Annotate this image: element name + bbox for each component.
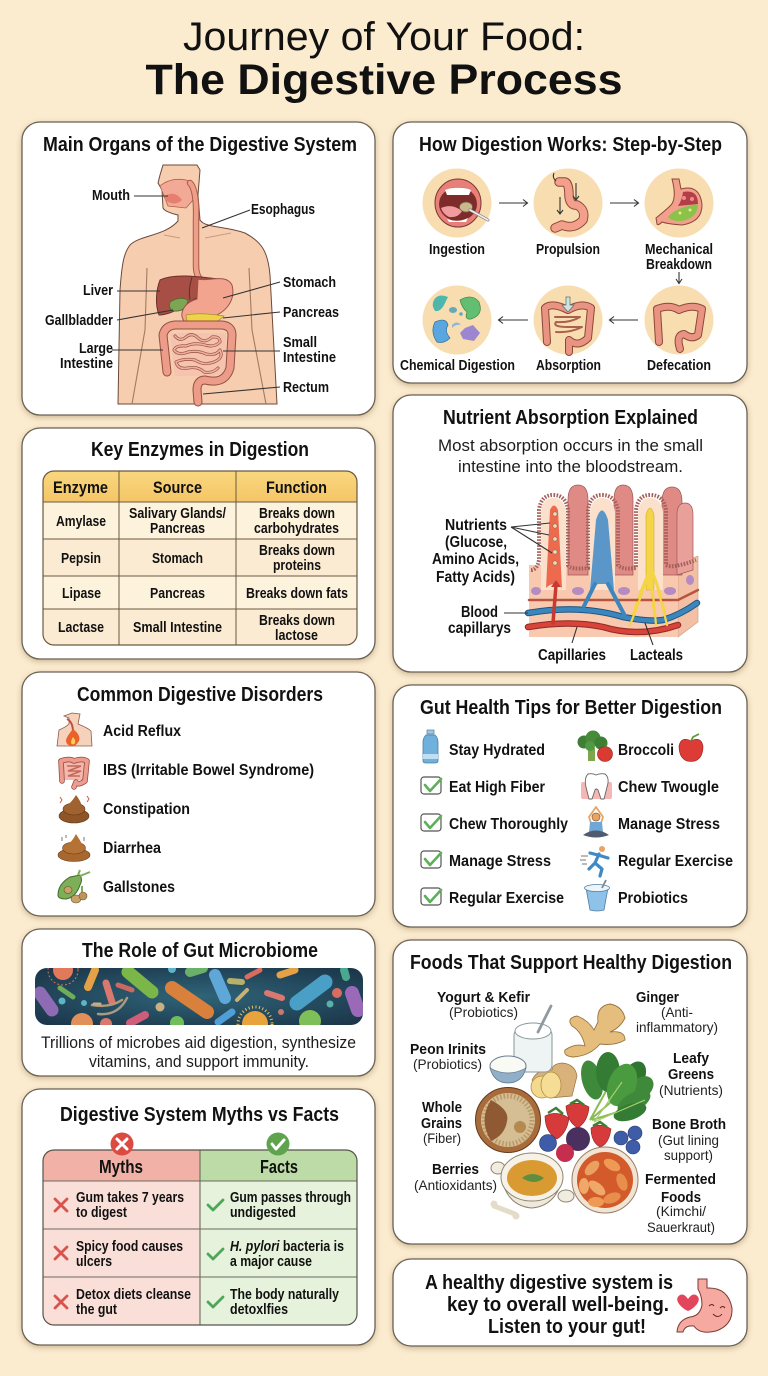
closing text: key to overall well-being. bbox=[447, 1294, 669, 1316]
icon: runner bbox=[580, 846, 608, 876]
microbiome description: Trillions of microbes aid digestion, synthesize bbox=[41, 1034, 356, 1052]
description: nutrient absorption: intestine into the bloodstream. bbox=[458, 457, 683, 476]
myths and facts table: Spicy food causes bbox=[76, 1239, 183, 1255]
villi diagram bbox=[528, 485, 698, 637]
myths and facts table: ulcers bbox=[76, 1254, 112, 1270]
step labels: Absorption bbox=[536, 358, 601, 374]
step labels: Ingestion bbox=[429, 242, 485, 258]
food labels: Sauerkraut) bbox=[647, 1219, 715, 1235]
yogurt jar bbox=[490, 1006, 552, 1083]
enzymes table: Salivary Glands/ bbox=[129, 506, 226, 522]
title bbox=[146, 15, 622, 104]
food labels: Ginger bbox=[636, 990, 679, 1006]
nutrient labels: Blood bbox=[461, 604, 498, 621]
myths and facts table: to digest bbox=[76, 1205, 127, 1221]
closing text: Listen to your gut! bbox=[488, 1316, 646, 1338]
step arrows bbox=[498, 200, 682, 324]
myths and facts table: Myths bbox=[99, 1157, 143, 1177]
icon: check bbox=[421, 851, 441, 868]
panel: closing message bbox=[393, 1259, 747, 1346]
tip label with apple: Broccoli bbox=[618, 742, 674, 759]
heading: gut health tips: Gut Health Tips for Better Digestion bbox=[420, 697, 722, 719]
organ labels bbox=[45, 188, 339, 396]
enzymes table: Breaks down bbox=[259, 613, 335, 629]
heading: nutrient absorption: Nutrient Absorption Explained bbox=[443, 407, 698, 429]
food labels: Peon Irinits bbox=[410, 1042, 486, 1058]
title: The Digestive Process bbox=[146, 56, 622, 104]
nutrient labels: Capillaries bbox=[538, 647, 606, 664]
myths and facts table: Gum takes 7 years bbox=[76, 1190, 184, 1206]
myths and facts table: undigested bbox=[230, 1205, 296, 1221]
food labels: (Probiotics) bbox=[449, 1004, 518, 1020]
food labels: support) bbox=[664, 1147, 713, 1163]
step labels: Propulsion bbox=[536, 242, 600, 258]
icon: myths cross bbox=[110, 1132, 134, 1156]
organ labels: Intestine bbox=[283, 350, 336, 366]
food labels: Grains bbox=[421, 1116, 462, 1132]
step icon: propulsion bbox=[534, 168, 602, 238]
tip label: Chew Thoroughly bbox=[449, 816, 568, 833]
organ labels: Small bbox=[283, 335, 317, 351]
myths and facts table: The body naturally bbox=[230, 1287, 339, 1303]
microbiome description bbox=[41, 1034, 356, 1071]
enzymes table: lactose bbox=[275, 628, 318, 644]
disorder label: Diarrhea bbox=[103, 840, 161, 857]
closing text: A healthy digestive system is bbox=[425, 1272, 673, 1294]
panel: gut health tips bbox=[393, 685, 747, 927]
enzymes table: Small Intestine bbox=[133, 620, 222, 636]
panel: main organs bbox=[22, 122, 375, 415]
organ labels: Esophagus bbox=[251, 202, 315, 218]
nutrient labels bbox=[432, 517, 683, 664]
enzymes table: Stomach bbox=[152, 551, 203, 567]
enzymes table: Breaks down bbox=[259, 506, 335, 522]
spinach bbox=[577, 1052, 658, 1125]
icon: facts check bbox=[266, 1132, 290, 1156]
myths and facts table: Facts bbox=[260, 1157, 298, 1177]
food labels: Berries bbox=[432, 1162, 479, 1178]
enzymes table: Amylase bbox=[56, 514, 106, 530]
enzymes table: Pancreas bbox=[150, 586, 205, 602]
enzymes table: Pancreas bbox=[150, 521, 205, 537]
step icon: chemical digestion bbox=[422, 286, 492, 354]
step labels: Chemical Digestion bbox=[400, 358, 515, 374]
tip label: Chew Twougle bbox=[618, 779, 719, 796]
nutrient labels: capillarys bbox=[448, 620, 511, 637]
organ labels: Liver bbox=[83, 283, 113, 299]
heading: how digestion works: How Digestion Works: Step-by-Step bbox=[419, 134, 722, 156]
icon: water bottle bbox=[423, 730, 438, 763]
enzymes table: Function bbox=[266, 478, 327, 497]
icon: check bbox=[421, 814, 441, 831]
description: nutrient absorption bbox=[438, 436, 703, 476]
nutrient labels: (Glucose, bbox=[445, 534, 507, 551]
icon: gallstones bbox=[58, 870, 90, 903]
icon: acid reflux bbox=[57, 713, 92, 746]
tip label: Regular Exercise bbox=[449, 890, 564, 907]
disorder label: Constipation bbox=[103, 801, 190, 818]
myths and facts table: Gum passes through bbox=[230, 1190, 351, 1206]
step icon: mechanical breakdown bbox=[644, 168, 714, 238]
food labels: (Anti- bbox=[661, 1004, 693, 1020]
enzymes table: Breaks down bbox=[259, 543, 335, 559]
nutrient labels: Fatty Acids) bbox=[436, 569, 515, 586]
enzymes table: Enzyme bbox=[53, 478, 108, 497]
myths and facts table: Detox diets cleanse bbox=[76, 1287, 191, 1303]
tip label with apple bbox=[618, 734, 703, 762]
enzymes table: carbohydrates bbox=[254, 521, 339, 537]
enzymes table: Pepsin bbox=[61, 551, 101, 567]
anatomy diagram bbox=[118, 165, 277, 404]
description: nutrient absorption: Most absorption occurs in the small bbox=[438, 436, 703, 455]
step icon: absorption bbox=[534, 286, 602, 354]
tip label: Regular Exercise bbox=[618, 853, 733, 870]
panel: nutrient absorption bbox=[393, 395, 747, 672]
food labels: (Probiotics) bbox=[413, 1056, 482, 1072]
enzymes table: Breaks down fats bbox=[246, 586, 348, 602]
myths and facts table: a major cause bbox=[230, 1254, 312, 1270]
panel: how digestion works bbox=[393, 122, 747, 383]
icon: stomach with heart bbox=[677, 1279, 732, 1332]
panel: key enzymes bbox=[22, 428, 375, 659]
step labels: Defecation bbox=[647, 358, 711, 374]
tip label: Manage Stress bbox=[618, 816, 720, 833]
tip label: Manage Stress bbox=[449, 853, 551, 870]
closing text bbox=[425, 1272, 673, 1338]
organ labels: Intestine bbox=[60, 356, 113, 372]
food labels: Fermented bbox=[645, 1172, 716, 1188]
enzymes table bbox=[43, 471, 357, 645]
ginger bbox=[531, 1004, 625, 1098]
myths and facts table: H. pylori bacteria is bbox=[230, 1239, 344, 1255]
bone broth bowl bbox=[490, 1153, 574, 1220]
food labels: Greens bbox=[668, 1067, 714, 1083]
nutrient leader lines bbox=[504, 523, 653, 645]
step labels: Mechanical bbox=[645, 242, 713, 258]
enzymes table: Source bbox=[153, 478, 202, 497]
icon: probiotics cup bbox=[584, 880, 610, 911]
food labels: Leafy bbox=[673, 1051, 709, 1067]
icon: diarrhea bbox=[58, 834, 90, 862]
panel: foods bbox=[393, 940, 747, 1244]
food labels bbox=[410, 990, 726, 1235]
tip label: Stay Hydrated bbox=[449, 742, 545, 759]
icon: ibs bbox=[61, 760, 87, 787]
panel: myths vs facts bbox=[22, 1089, 375, 1345]
enzymes table: Lipase bbox=[62, 586, 101, 602]
nutrient labels: Nutrients bbox=[445, 517, 507, 534]
food labels: Whole bbox=[422, 1100, 462, 1116]
food labels: inflammatory) bbox=[636, 1019, 718, 1035]
food labels: (Antioxidants) bbox=[414, 1177, 497, 1193]
step icon: ingestion bbox=[422, 168, 492, 238]
heading: myths vs facts: Digestive System Myths vs Facts bbox=[60, 1104, 339, 1126]
food labels: Bone Broth bbox=[652, 1117, 726, 1133]
organ labels: Stomach bbox=[283, 275, 336, 291]
organ labels: Pancreas bbox=[283, 305, 339, 321]
organ labels: Mouth bbox=[92, 188, 130, 204]
food labels: (Fiber) bbox=[423, 1130, 461, 1146]
food labels: (Nutrients) bbox=[659, 1082, 723, 1098]
organ labels: Large bbox=[79, 341, 113, 357]
enzymes table: Lactase bbox=[58, 620, 104, 636]
title: Journey of Your Food: bbox=[183, 15, 585, 59]
food labels: Yogurt & Kefir bbox=[437, 990, 530, 1006]
icon: meditation bbox=[583, 807, 609, 838]
panel: gut microbiome bbox=[22, 929, 375, 1076]
myths and facts table bbox=[43, 1150, 357, 1325]
disorder label: Acid Reflux bbox=[103, 723, 181, 740]
food labels: (Gut lining bbox=[658, 1132, 719, 1148]
heading: main organs: Main Organs of the Digestive System bbox=[43, 134, 357, 156]
icon: check bbox=[421, 888, 441, 905]
kimchi bowl bbox=[572, 1147, 638, 1213]
step labels: Breakdown bbox=[646, 257, 712, 273]
organ leader lines bbox=[112, 196, 280, 394]
food labels: (Kimchi/ bbox=[656, 1203, 706, 1219]
food labels: Foods bbox=[661, 1190, 701, 1206]
microbiome description: vitamins, and support immunity. bbox=[89, 1053, 309, 1071]
tip label: Probiotics bbox=[618, 890, 688, 907]
heading: microbiome: The Role of Gut Microbiome bbox=[82, 940, 318, 962]
panel: disorders bbox=[22, 672, 375, 916]
organ labels: Gallbladder bbox=[45, 313, 113, 329]
disorder label: Gallstones bbox=[103, 879, 175, 896]
heading: disorders: Common Digestive Disorders bbox=[77, 684, 323, 706]
step icon: defecation bbox=[644, 286, 714, 354]
myths and facts table: detoxlfies bbox=[230, 1302, 288, 1318]
disorder label: IBS (Irritable Bowel Syndrome) bbox=[103, 762, 314, 779]
myths and facts table: the gut bbox=[76, 1302, 117, 1318]
nutrient labels: Lacteals bbox=[630, 647, 683, 664]
berries bbox=[540, 1100, 642, 1162]
icon: constipation bbox=[59, 795, 89, 823]
tip label: Eat High Fiber bbox=[449, 779, 545, 796]
food illustration bbox=[476, 1004, 658, 1220]
microbe illustration bbox=[35, 968, 363, 1025]
whole grains bowl bbox=[476, 1088, 540, 1152]
icon: broccoli and apple bbox=[578, 730, 612, 762]
icon: check bbox=[421, 777, 441, 794]
heading: key enzymes: Key Enzymes in Digestion bbox=[91, 439, 309, 461]
nutrient labels: Amino Acids, bbox=[432, 551, 519, 568]
heading: foods: Foods That Support Healthy Digestion bbox=[410, 952, 732, 974]
organ labels: Rectum bbox=[283, 380, 329, 396]
enzymes table: proteins bbox=[273, 558, 321, 574]
icon: tooth bbox=[581, 774, 612, 799]
step labels bbox=[400, 242, 713, 374]
